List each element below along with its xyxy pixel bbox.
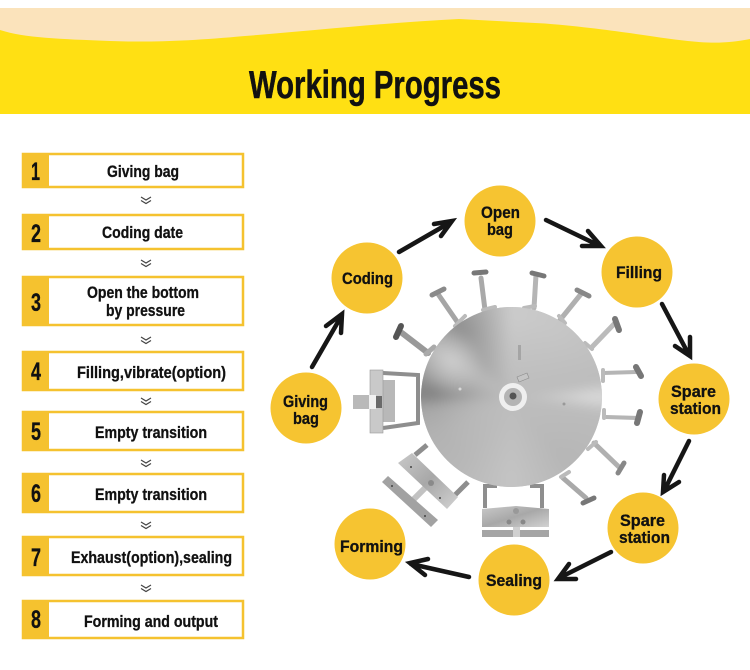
circle: forming bbox=[334, 508, 406, 580]
step 7 bbox=[22, 536, 243, 576]
arrow: open bag to filling bbox=[546, 220, 601, 246]
left clamp bbox=[353, 370, 418, 433]
step 3 bbox=[22, 276, 243, 326]
step 2: Coding date bbox=[102, 223, 183, 242]
arrow: filling to spare station bbox=[662, 304, 690, 356]
step 5: Empty transition bbox=[95, 423, 207, 442]
chevron 1 bbox=[141, 197, 151, 204]
circle: spare station 2 bbox=[608, 492, 678, 564]
circle: sealing: Sealing bbox=[486, 571, 542, 590]
chevron 7 bbox=[141, 585, 151, 592]
step 4: Filling,vibrate(option) bbox=[77, 363, 226, 382]
arrow: spare station to sealing bbox=[558, 552, 611, 579]
circle: giving bag: bag bbox=[293, 409, 319, 428]
chevron 4 bbox=[141, 398, 151, 404]
step 3: by pressure bbox=[106, 301, 185, 320]
arrow: coding to open bag bbox=[399, 221, 452, 252]
process circles bbox=[270, 186, 730, 616]
circle: spare station 1 bbox=[658, 364, 730, 434]
circle: forming: Forming bbox=[340, 537, 403, 556]
step 3: Open the bottom bbox=[87, 283, 199, 302]
circle: filling bbox=[602, 236, 672, 308]
chevron 3 bbox=[141, 337, 151, 344]
step 6 bbox=[22, 473, 243, 513]
chevron 5 bbox=[141, 460, 151, 466]
step 6: Empty transition bbox=[95, 485, 207, 504]
step 4: 4 bbox=[31, 358, 41, 386]
chevron 2 bbox=[141, 260, 151, 266]
circle: spare station 2: station bbox=[619, 528, 670, 547]
step 6: 6 bbox=[31, 480, 41, 508]
steel disc bbox=[421, 307, 602, 487]
circle: coding: Coding bbox=[342, 269, 393, 288]
step 2 bbox=[22, 214, 243, 250]
lower-left clamp bbox=[382, 445, 468, 527]
circle: spare station 1: station bbox=[670, 399, 721, 418]
circle: open bag: Open bbox=[481, 203, 520, 222]
step 4 bbox=[22, 351, 243, 391]
step 3: 3 bbox=[31, 289, 41, 317]
circle: filling: Filling bbox=[616, 263, 662, 282]
step 8: Forming and output bbox=[84, 612, 218, 631]
process arrows bbox=[312, 220, 690, 579]
step 8 bbox=[22, 600, 243, 639]
bottom clamp bbox=[482, 486, 549, 537]
circle: open bag bbox=[464, 186, 536, 256]
step 7: Exhaust(option),sealing bbox=[71, 548, 232, 567]
step 1: 1 bbox=[31, 158, 40, 186]
step list bbox=[22, 153, 243, 639]
radial arms bbox=[396, 272, 641, 503]
header wave bbox=[0, 8, 750, 43]
circle: spare station 1: Spare bbox=[671, 382, 716, 401]
arrow: spare station to spare station bbox=[663, 441, 689, 492]
machine illustration bbox=[353, 272, 641, 537]
step 1 bbox=[22, 153, 243, 188]
step 5 bbox=[22, 411, 243, 451]
disc hub bbox=[458, 345, 566, 411]
circle: giving bag: Giving bbox=[283, 392, 328, 411]
step 8: 8 bbox=[31, 606, 41, 634]
step 1: Giving bag bbox=[107, 162, 179, 181]
step 7: 7 bbox=[31, 544, 41, 572]
circle: coding bbox=[332, 242, 402, 314]
arrow: giving bag to coding bbox=[312, 314, 342, 367]
circle: spare station 2: Spare bbox=[620, 511, 665, 530]
circle: giving bag bbox=[270, 372, 342, 444]
arrow: sealing to forming bbox=[410, 559, 469, 577]
step 5: 5 bbox=[31, 418, 41, 446]
step 2: 2 bbox=[31, 220, 41, 248]
chevron 6 bbox=[141, 522, 151, 528]
header band bbox=[0, 8, 750, 114]
title: Working Progress bbox=[249, 64, 501, 107]
circle: open bag: bag bbox=[487, 220, 513, 239]
circle: sealing bbox=[478, 544, 550, 616]
